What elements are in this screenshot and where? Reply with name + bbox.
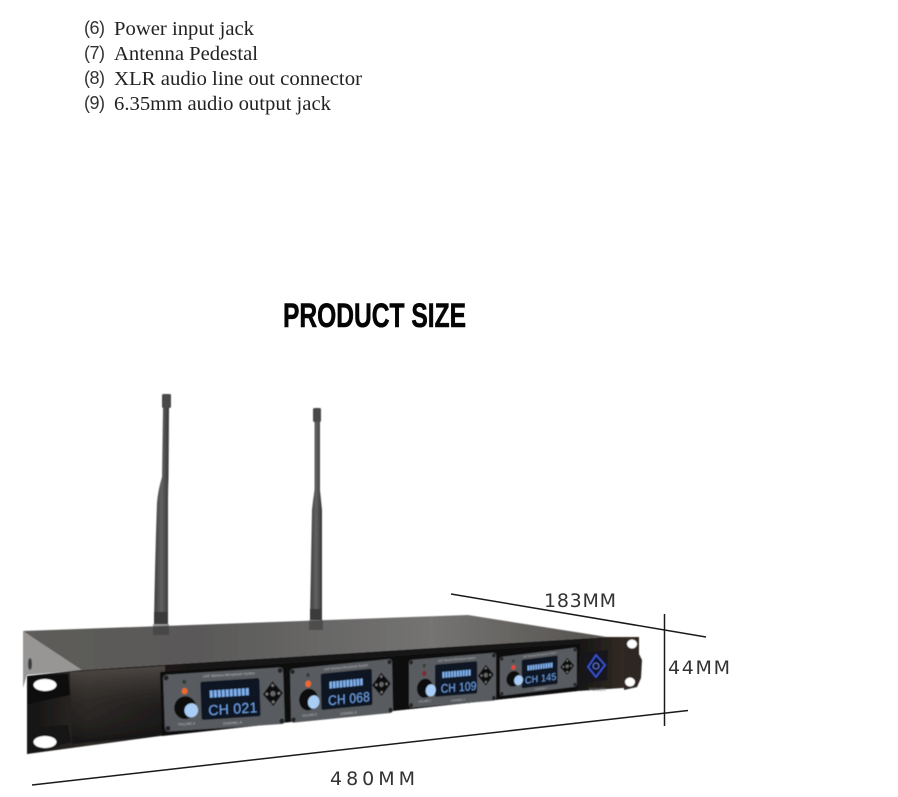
depth line bbox=[451, 594, 706, 637]
list item 8: XLR audio line out connector bbox=[114, 68, 362, 90]
height line bbox=[664, 614, 666, 726]
channel panel 1: CHANNEL A bbox=[223, 720, 243, 726]
channel panel 2: CH 068 bbox=[328, 688, 370, 709]
product: wireless receiver bbox=[23, 394, 642, 754]
channel panel 3: CH 109 bbox=[441, 680, 476, 696]
channel panel 2 bbox=[290, 659, 393, 723]
chassis front face bbox=[27, 637, 639, 754]
antenna base shadows bbox=[153, 620, 323, 635]
power button: POWER bbox=[589, 687, 607, 692]
list item 6: (6) bbox=[84, 18, 105, 38]
left antenna bbox=[154, 394, 171, 624]
black panel band bbox=[160, 644, 580, 736]
channel panel 4: CHANNEL D bbox=[535, 687, 547, 691]
screw mark on side bbox=[28, 658, 32, 670]
power button bbox=[584, 650, 608, 692]
feature list bbox=[84, 18, 362, 115]
list item 8: (8) bbox=[84, 68, 105, 88]
channel panel 1: VOLUME A bbox=[178, 721, 196, 727]
list item 9: 6.35mm audio output jack bbox=[114, 93, 331, 115]
width line bbox=[32, 710, 688, 785]
right antenna bbox=[310, 408, 322, 620]
label: width: 480MM bbox=[330, 768, 415, 790]
right rack ear bbox=[624, 637, 642, 690]
chassis side bbox=[23, 631, 82, 688]
chassis top surface bbox=[23, 615, 607, 670]
channel panel 1: UHF Wireless Microphone System bbox=[203, 671, 255, 679]
label: height: 44MM bbox=[668, 657, 730, 679]
channel panel 4: CH 145 bbox=[525, 671, 556, 687]
channel panel 3: UHF Wireless Microphone System bbox=[438, 655, 476, 663]
left rack ear bbox=[27, 674, 71, 754]
list item 7: (7) bbox=[84, 43, 105, 63]
channel panel 3: VOLUME C bbox=[418, 698, 431, 704]
left front sheen bbox=[70, 666, 165, 744]
channel panel 3: CHANNEL C bbox=[451, 697, 465, 703]
list item 7: Antenna Pedestal bbox=[114, 43, 258, 65]
title: PRODUCT SIZE bbox=[283, 297, 466, 335]
dimension lines bbox=[32, 594, 706, 785]
list item 9: (9) bbox=[84, 93, 105, 113]
channel panel 4: UHF Wireless Microphone System bbox=[523, 651, 556, 659]
channel panel 3 bbox=[409, 653, 496, 708]
channel panel 1: CH 021 bbox=[208, 700, 258, 719]
channel panel 2: UHF Wireless Microphone System bbox=[324, 663, 368, 672]
channel panel 4 bbox=[500, 647, 577, 696]
channel panel 2: CHANNEL B bbox=[340, 710, 357, 716]
channel panel 1 bbox=[163, 667, 285, 732]
left rack ear holes bbox=[34, 679, 56, 748]
channel panel 2: VOLUME B bbox=[302, 712, 317, 718]
list item 6: Power input jack bbox=[114, 18, 254, 40]
label: depth: 183MM bbox=[544, 590, 616, 612]
